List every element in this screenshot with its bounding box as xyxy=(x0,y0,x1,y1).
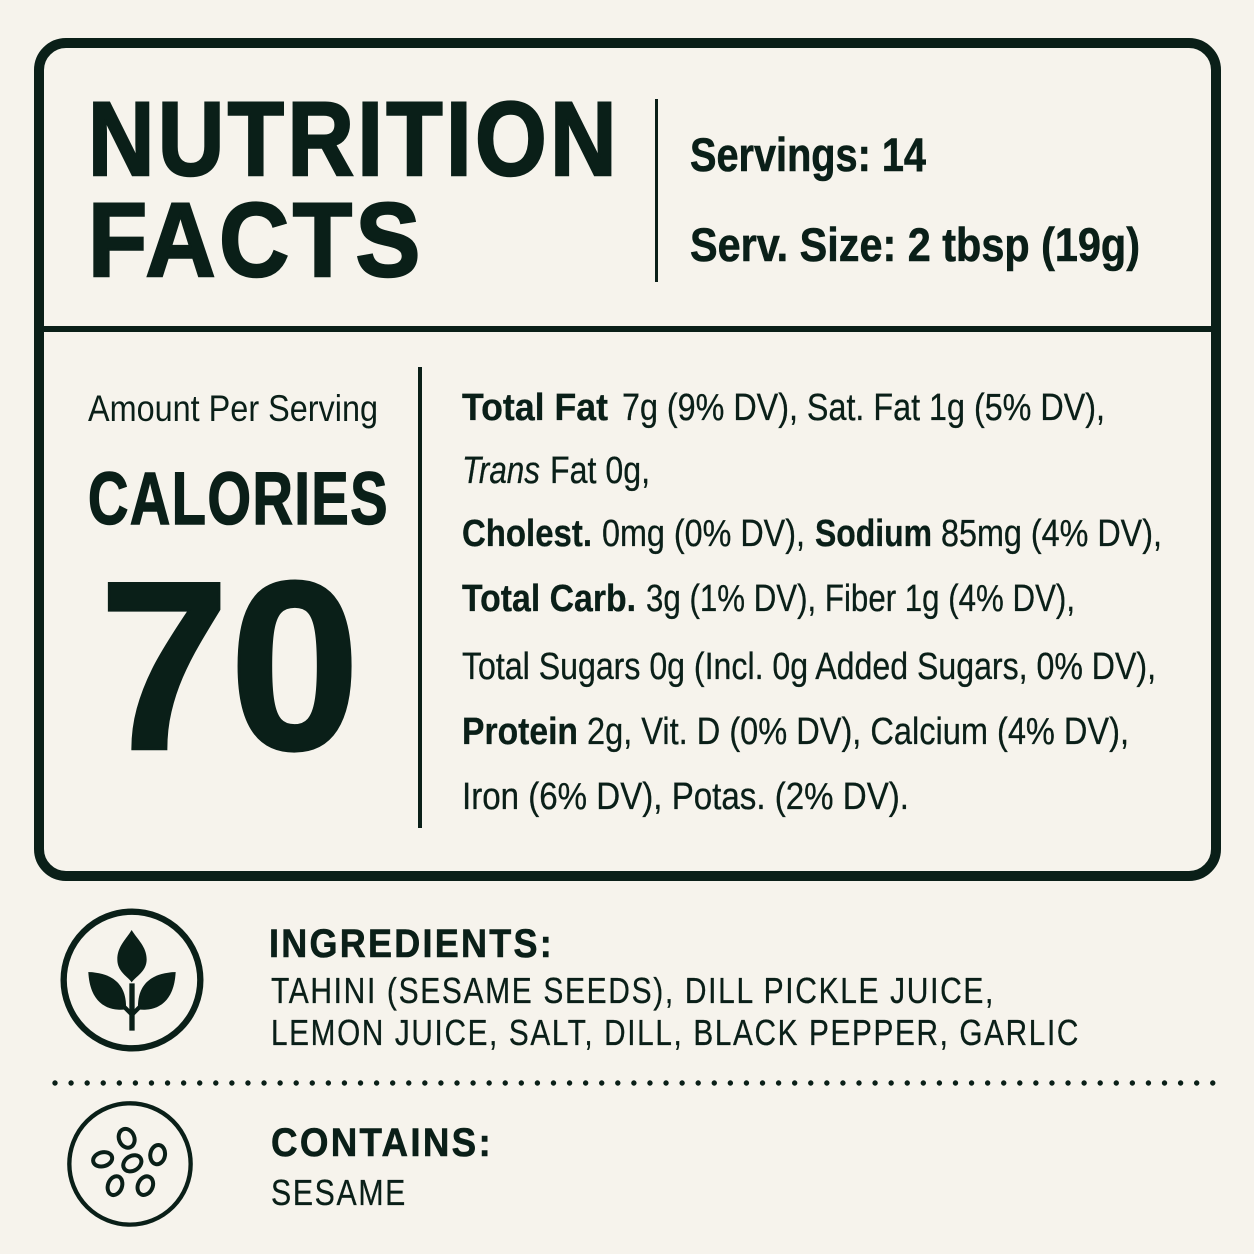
ingredients text: LEMON JUICE, SALT, DILL, BLACK PEPPER, GARLIC xyxy=(271,1012,1080,1053)
allergen text xyxy=(271,1121,493,1213)
nutrient list: 0mg (0% DV), xyxy=(602,513,805,555)
calories heading: CALORIES xyxy=(88,457,389,540)
ingredients text: INGREDIENTS: xyxy=(269,922,554,966)
calories value: 70 xyxy=(99,532,360,801)
icon: sesame seeds xyxy=(69,1103,191,1225)
title: FACTS xyxy=(88,182,424,299)
nutrient list xyxy=(462,387,1162,818)
allergen text: SESAME xyxy=(271,1172,407,1213)
nutrient list: 2g, Vit. D (0% DV), Calcium (4% DV), xyxy=(587,711,1129,753)
serving information: Serv. Size: 2 tbsp (19g) xyxy=(690,218,1140,271)
nutrient list: 7g (9% DV), Sat. Fat 1g (5% DV), xyxy=(622,387,1105,429)
allergen text: CONTAINS: xyxy=(271,1121,493,1165)
nutrient list: Trans xyxy=(462,450,540,492)
serving information: Servings: 14 xyxy=(690,128,926,181)
dotted separator xyxy=(55,1080,1216,1086)
title xyxy=(88,81,620,299)
nutrient list: Total Carb. xyxy=(462,578,636,620)
nutrient list: Total Fat xyxy=(462,387,608,429)
nutrient list: Cholest. xyxy=(462,513,592,555)
nutrition facts panel xyxy=(39,43,1216,876)
icon: plant leaves xyxy=(64,912,200,1048)
serving information xyxy=(690,128,1140,271)
amount per serving label: Amount Per Serving xyxy=(88,388,378,429)
nutrient list: 3g (1% DV), Fiber 1g (4% DV), xyxy=(646,578,1075,620)
nutrient list: Fat 0g, xyxy=(550,450,650,492)
ingredients text xyxy=(269,922,1080,1053)
ingredients text: TAHINI (SESAME SEEDS), DILL PICKLE JUICE, xyxy=(271,970,995,1011)
title: NUTRITION xyxy=(88,81,620,198)
nutrient list: 85mg (4% DV), xyxy=(941,513,1162,555)
nutrient list: Protein xyxy=(462,711,578,753)
nutrient list: Iron (6% DV), Potas. (2% DV). xyxy=(462,776,909,818)
nutrient list: Sodium xyxy=(815,513,932,555)
